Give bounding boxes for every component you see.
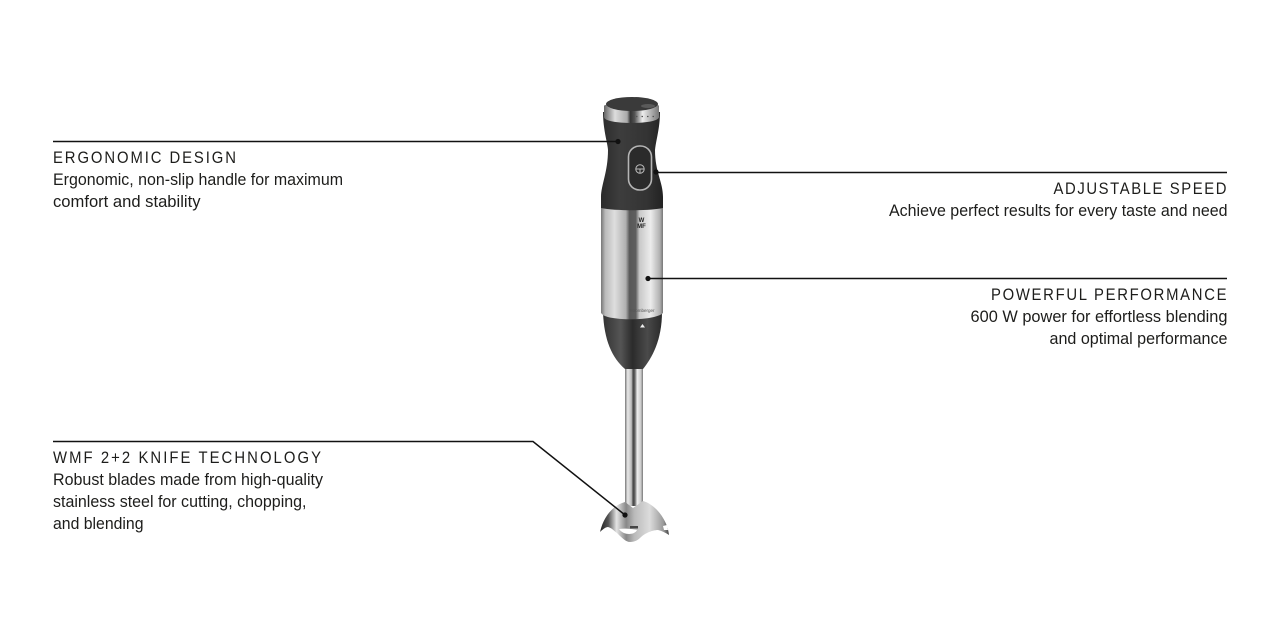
product brand mark: Stromberger	[629, 308, 655, 313]
hand blender product illustration	[600, 97, 669, 542]
WMF logo: W	[639, 218, 645, 224]
collar dots	[636, 116, 658, 118]
description: Achieve perfect results for every taste and need	[889, 201, 1228, 220]
callout: powerful performance	[645, 276, 1228, 348]
leader line	[656, 172, 1227, 174]
description: and blending	[53, 514, 144, 533]
hand blender product illustration: MF	[637, 224, 646, 230]
heading: ERGONOMIC DESIGN	[53, 149, 236, 167]
leader dot	[622, 512, 628, 518]
blade guard bell	[600, 501, 669, 542]
description: and optimal performance	[1050, 329, 1228, 348]
description: comfort and stability	[53, 192, 201, 211]
arrow mark	[640, 324, 645, 328]
leader line	[648, 278, 1227, 280]
heading: WMF 2+2 KNIFE TECHNOLOGY	[53, 449, 322, 467]
leader line	[53, 140, 618, 142]
top cap	[606, 97, 658, 111]
leader dot	[645, 276, 651, 281]
callout: ergonomic design	[53, 139, 621, 211]
lower black cone	[603, 312, 662, 369]
stainless steel motor body	[601, 205, 663, 319]
leader line	[53, 442, 625, 515]
leader dot	[653, 169, 659, 175]
callout: WMF 2+2 knife technology	[53, 442, 628, 533]
description: 600 W power for effortless blending	[970, 307, 1228, 326]
power switch	[628, 146, 652, 190]
blender shaft	[625, 366, 643, 506]
cap button	[641, 104, 655, 108]
heading: POWERFUL PERFORMANCE	[991, 286, 1227, 304]
heading: ADJUSTABLE SPEED	[1054, 180, 1226, 198]
callout: adjustable speed	[653, 169, 1228, 220]
description: Ergonomic, non-slip handle for maximum	[53, 170, 343, 189]
description: stainless steel for cutting, chopping,	[53, 492, 306, 511]
leader dot	[615, 139, 621, 144]
description: Robust blades made from high-quality	[53, 470, 323, 489]
metal collar	[604, 103, 659, 123]
black handle	[601, 112, 663, 210]
